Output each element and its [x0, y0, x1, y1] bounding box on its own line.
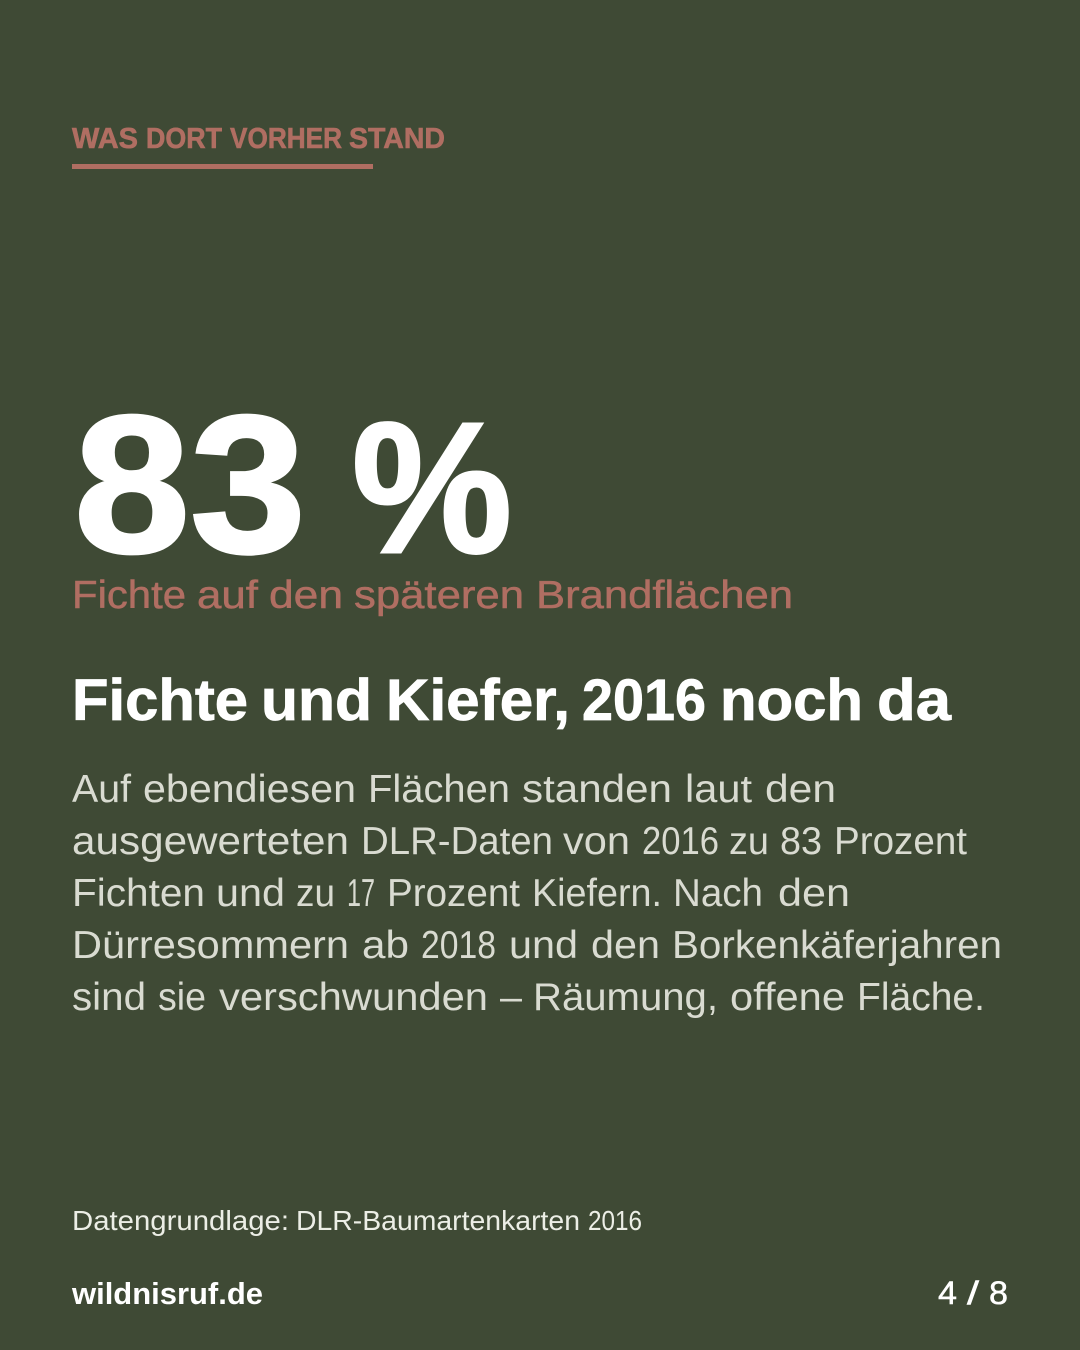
- body text: Prozent: [387, 872, 520, 915]
- number caption: den: [269, 574, 343, 617]
- body text: den: [778, 872, 850, 915]
- eyebrow heading: WAS: [72, 123, 138, 155]
- body text: ebendiesen: [143, 768, 356, 811]
- big number: %: [352, 385, 512, 592]
- body text: Flächen: [368, 768, 510, 811]
- source note: DLR-Baumartenkarten: [296, 1205, 580, 1236]
- body text: sind: [72, 976, 146, 1019]
- source note: 2016: [588, 1205, 642, 1236]
- body text: laut: [685, 768, 752, 811]
- body text: 17: [347, 872, 375, 915]
- eyebrow heading: VORHER: [230, 123, 342, 155]
- headline: 2016: [582, 668, 706, 733]
- body text: und: [216, 872, 285, 915]
- headline: Kiefer,: [386, 668, 570, 733]
- body text: ausgewerteten: [72, 820, 349, 863]
- body text: Kiefern.: [532, 872, 662, 915]
- page number: /: [967, 1275, 979, 1311]
- footer site name: wildnisruf.de: [71, 1276, 263, 1311]
- body text: [72, 768, 1002, 1019]
- headline: noch: [720, 668, 863, 733]
- body text: 2018: [421, 924, 496, 967]
- body text: –: [500, 976, 522, 1019]
- body text: sie: [158, 976, 206, 1019]
- body text: offene: [730, 976, 845, 1019]
- body text: Räumung,: [533, 976, 718, 1019]
- page number: 4: [938, 1275, 957, 1311]
- body text: Auf: [72, 768, 131, 811]
- number caption: Fichte: [72, 574, 186, 617]
- number caption: Brandflächen: [536, 574, 793, 617]
- body text: 2016: [642, 820, 719, 863]
- headline: da: [877, 668, 952, 733]
- body text: ab: [362, 924, 409, 967]
- big number: 83: [74, 375, 306, 594]
- headline: und: [261, 668, 372, 733]
- body text: Dürresommern: [72, 924, 349, 967]
- eyebrow heading: STAND: [349, 123, 445, 155]
- body text: standen: [522, 768, 672, 811]
- body text: und: [509, 924, 578, 967]
- body text: zu: [296, 872, 335, 915]
- body text: DLR-Daten: [361, 820, 553, 863]
- number caption: späteren: [354, 574, 524, 617]
- body text: Fichten: [72, 872, 205, 915]
- page number: 8: [989, 1275, 1008, 1311]
- eyebrow heading: [72, 123, 445, 169]
- body text: Borkenkäferjahren: [672, 924, 1002, 967]
- body text: verschwunden: [219, 976, 488, 1019]
- body text: Fläche.: [857, 976, 985, 1019]
- headline: Fichte: [72, 668, 248, 733]
- body text: Prozent: [834, 820, 967, 863]
- body text: zu: [729, 820, 769, 863]
- body text: den: [591, 924, 660, 967]
- body text: den: [765, 768, 836, 811]
- body text: Nach: [673, 872, 763, 915]
- eyebrow heading: DORT: [146, 123, 222, 155]
- number caption: auf: [197, 574, 258, 617]
- source note: Datengrundlage:: [72, 1205, 289, 1236]
- body text: 83: [780, 820, 822, 863]
- body text: von: [563, 820, 630, 863]
